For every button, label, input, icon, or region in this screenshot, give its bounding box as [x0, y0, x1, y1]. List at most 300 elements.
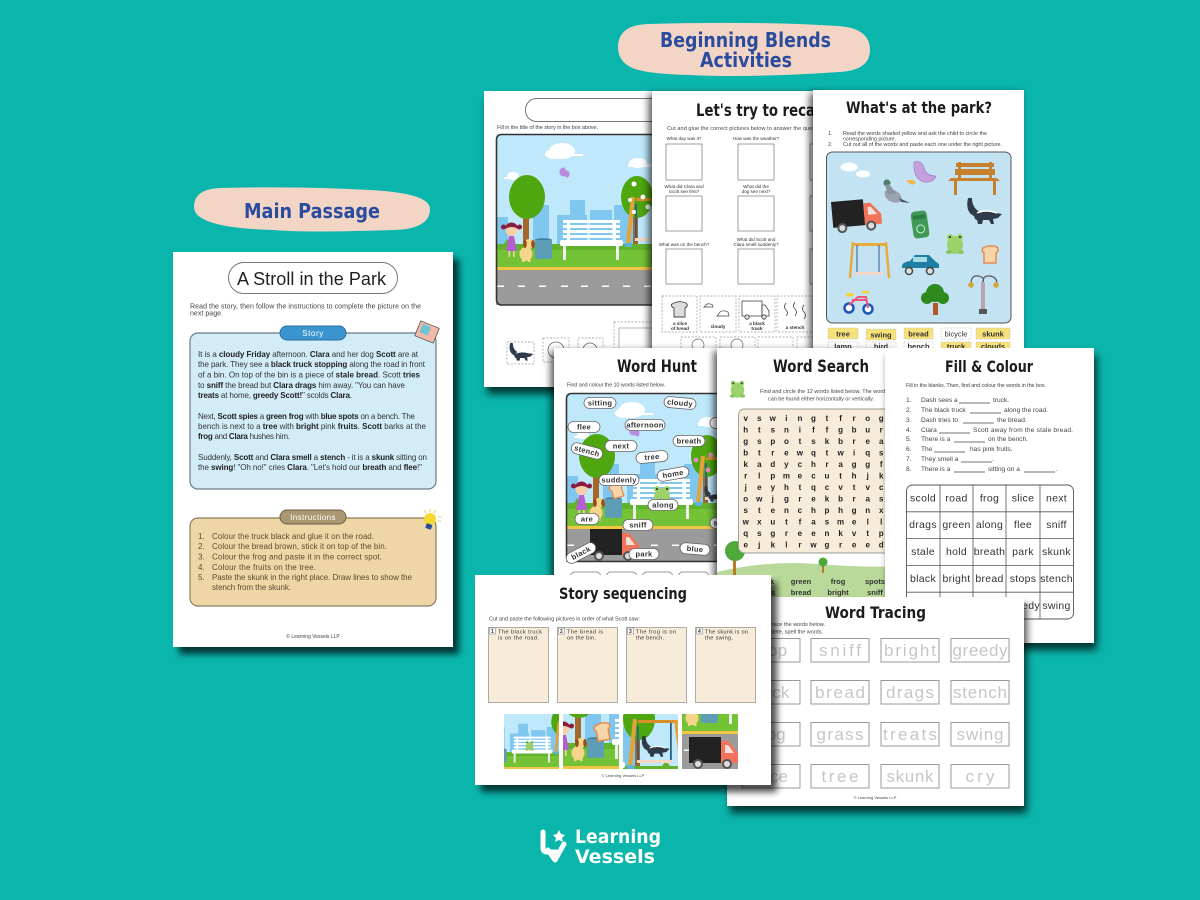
fill-in sentences: Dash sees a — [921, 397, 958, 404]
story box: to sniff the bread but Clara drags him away. "You can have — [198, 381, 406, 390]
instructions: 2. — [828, 142, 833, 148]
letter grid: f — [839, 414, 842, 423]
letter grid: p — [879, 529, 884, 538]
word grid: stops — [1010, 573, 1036, 585]
tracing boxes: drags — [886, 683, 934, 702]
heading: Beginning Blends Activities — [618, 23, 870, 76]
word grid — [906, 485, 1074, 619]
letter grid: w — [809, 540, 817, 550]
picture: truck on road — [662, 598, 962, 769]
letter grid: t — [826, 414, 829, 423]
question grid: What was on the bench? — [659, 242, 710, 247]
letter grid: r — [880, 426, 883, 434]
word list — [755, 577, 885, 597]
letter grid: s — [743, 506, 748, 515]
heading: Main Passage — [194, 187, 430, 232]
word grid: drags — [909, 519, 937, 531]
instruction: Find and colour the 10 words listed below. — [567, 382, 665, 388]
fill-in sentences: 8. — [906, 466, 912, 473]
letter grid: o — [743, 494, 748, 504]
instructions: Cut out all of the words and paste each one under the right picture. — [843, 142, 1002, 148]
title: Story sequencing — [559, 584, 687, 603]
letter grid: q — [811, 448, 816, 458]
letter grid: c — [798, 506, 803, 515]
word list: bright — [827, 588, 849, 597]
fill-in sentences: 4. — [906, 427, 912, 434]
title: Word Search — [773, 357, 869, 377]
tracing boxes: greedy — [952, 641, 1008, 660]
word grid: bright — [942, 573, 971, 585]
letter grid: k — [838, 529, 843, 538]
panel: Fill & Colour page — [885, 348, 1094, 643]
letter grid: k — [743, 460, 748, 469]
letter grid: t — [758, 426, 761, 434]
letter grid: g — [838, 426, 843, 434]
letter grid: c — [811, 472, 816, 480]
letter grid: t — [758, 506, 761, 515]
word tags — [564, 396, 740, 583]
fill-in sentences: sitting on a — [988, 466, 1020, 473]
letter grid: s — [757, 437, 762, 446]
tracing boxes: slice — [754, 767, 788, 786]
question grid: What did Scott and — [737, 237, 776, 242]
word tags: cloudy — [667, 397, 694, 409]
letter grid: l — [785, 540, 788, 550]
instructions — [760, 389, 888, 402]
instructions — [745, 622, 825, 636]
word tags: flee — [577, 422, 591, 432]
instructions: Once complete, spell the words. — [745, 630, 823, 636]
tracing boxes: tree — [822, 767, 858, 786]
fill-in sentences: 6. — [906, 446, 912, 453]
word grid: green — [942, 519, 971, 531]
letter grid: b — [852, 426, 857, 434]
word tags: sniff — [629, 520, 647, 530]
tracing boxes: grass — [816, 725, 864, 744]
letter grid: j — [866, 472, 869, 480]
panel: Word Hunt page — [554, 348, 866, 638]
word tags: suddenly — [601, 476, 637, 484]
letter grid: r — [853, 494, 856, 504]
answer cut-outs: a black — [749, 321, 765, 326]
letter grid: f — [812, 426, 815, 434]
letter grid: k — [825, 437, 830, 446]
question grid: What day was it? — [667, 136, 702, 141]
letter grid: t — [826, 448, 829, 458]
letter grid: t — [839, 472, 842, 480]
word grid: hold — [946, 546, 967, 558]
word grid: stale — [911, 546, 935, 558]
panel: Word Tracing page — [727, 597, 1024, 806]
word tags: breath — [677, 436, 701, 446]
picture: bread on bin — [548, 633, 848, 804]
instructions box: Paste the skunk in the right place. Draw lines to show the — [212, 573, 413, 582]
icon: car — [902, 255, 939, 274]
word tags: tree — [644, 452, 660, 462]
letter grid: x — [879, 506, 884, 515]
fill-in sentences: truck. — [993, 397, 1009, 404]
title: Word Hunt — [617, 357, 697, 377]
instruction: Fill in the blanks. Then, find and colour the words in the box. — [906, 383, 1046, 389]
letter grid: h — [784, 483, 789, 492]
instructions: corresponding picture. — [843, 136, 896, 142]
heading: Beginning Blends Activities: Activities — [700, 48, 792, 72]
letter grid — [738, 409, 928, 553]
icon: bicycle — [844, 291, 872, 314]
fill-in sentences: . — [1056, 466, 1058, 473]
letter grid: t — [785, 518, 788, 526]
story box: bench is next to a tree with bright pink fruits. Scott barks at the — [198, 422, 427, 431]
letter grid: l — [867, 518, 869, 526]
letter grid: d — [770, 460, 775, 469]
letter grid: e — [865, 540, 870, 550]
letter grid: w — [796, 448, 804, 458]
word list: green — [791, 577, 812, 586]
answer cut-outs: truck — [751, 326, 763, 331]
letter grid: s — [757, 414, 762, 423]
sequence boxes — [488, 628, 756, 702]
letter grid: h — [838, 506, 843, 515]
letter grid: e — [852, 518, 857, 526]
letter grid: r — [771, 448, 774, 458]
picture with hidden words — [566, 393, 866, 564]
answer cut-outs: a slice — [673, 321, 687, 326]
word cut-outs: skunk — [982, 330, 1005, 338]
story box: the swing! "Oh no!" cries Clara. "Let's hold our breath and flee!" — [198, 463, 422, 472]
word grid: bread — [975, 573, 1004, 585]
instructions: 1. — [828, 131, 833, 137]
word tags: blue — [686, 544, 704, 554]
story box: Suddenly, Scott and Clara smell a stench - it is a skunk sitting on — [198, 453, 427, 462]
letter grid: f — [799, 518, 802, 526]
tracing boxes: bread — [815, 683, 865, 702]
word grid: flee — [1014, 519, 1032, 531]
instructions box: 5. — [198, 573, 205, 582]
letter grid: v — [743, 414, 748, 423]
letter grid: e — [771, 506, 776, 515]
word grid: greedy — [1006, 600, 1040, 612]
sequence boxes: the bench. — [636, 636, 664, 642]
letter grid: o — [784, 437, 789, 446]
word list: spots — [865, 577, 885, 586]
word tags: afternoon — [626, 420, 664, 430]
word grid: breath — [974, 546, 1005, 558]
sequence boxes: The frog is on — [636, 630, 676, 636]
sequence boxes: 4 — [698, 629, 701, 635]
sequence boxes: The bread is — [567, 630, 603, 636]
title: Word Tracing — [825, 603, 926, 622]
instructions box: Colour the bread brown, stick it on top of the bin. — [212, 542, 387, 551]
story title pill: A Stroll in the Park — [237, 269, 387, 289]
question grid: dog see next? — [742, 189, 771, 194]
letter grid: r — [785, 529, 788, 538]
letter grid: j — [771, 494, 774, 504]
footer: © Learning Vessels LLP — [286, 633, 340, 640]
word tags: hold — [716, 418, 734, 428]
letter grid: k — [825, 494, 830, 504]
letter grid: g — [743, 437, 748, 446]
logo: Learning Vessels: Vessels — [575, 846, 655, 868]
tracing boxes: stench — [953, 683, 1007, 702]
letter grid: e — [798, 529, 803, 538]
word grid: park — [1012, 546, 1034, 558]
letter grid: i — [785, 414, 788, 423]
title: What's at the park? — [846, 98, 992, 117]
instructions box: 4. — [198, 563, 205, 572]
icon: tree — [921, 284, 949, 315]
instructions box: 2. — [198, 542, 205, 551]
letter grid: r — [825, 460, 829, 469]
fill-in sentences — [906, 397, 1073, 473]
letter grid: g — [825, 540, 830, 550]
letter grid: o — [865, 414, 870, 423]
letter grid: e — [757, 483, 762, 492]
icon: frog — [730, 381, 745, 398]
letter grid: p — [770, 437, 775, 446]
word cut-outs: bench — [907, 342, 930, 351]
fill-in sentences: The — [921, 446, 933, 453]
question grid: What did the — [743, 184, 769, 189]
letter grid: p — [770, 472, 775, 480]
word grid: swing — [1042, 600, 1071, 612]
letter grid: v — [852, 529, 857, 538]
word grid: skunk — [1042, 546, 1071, 558]
instructions — [828, 131, 1002, 148]
fill-in sentences: There is a — [921, 466, 951, 473]
letter grid: m — [783, 472, 790, 480]
answer cut-outs — [662, 296, 832, 367]
story box: Story — [302, 329, 324, 338]
letter grid: e — [865, 437, 870, 446]
fill-in sentences: Dash tries to — [921, 417, 958, 424]
letter grid: b — [838, 494, 843, 504]
letter grid: g — [784, 494, 789, 504]
letter grid: j — [744, 483, 747, 492]
letter grid: s — [757, 529, 762, 538]
letter grid: g — [865, 460, 870, 469]
letter grid: a — [838, 460, 843, 469]
letter grid: r — [839, 540, 842, 550]
instructions box: Instructions — [290, 513, 336, 522]
letter grid: f — [880, 460, 883, 469]
letter grid: g — [879, 414, 884, 423]
letter grid: t — [799, 437, 802, 446]
letter grid: n — [825, 529, 830, 538]
park picture — [496, 134, 796, 305]
instruction: Cut and glue the correct pictures below to answer the questions — [667, 126, 827, 132]
letter grid: m — [837, 518, 844, 526]
instructions box: Colour the truck black and glue it on the road. — [212, 532, 374, 541]
letter grid: e — [811, 494, 816, 504]
word cut-outs: clouds — [981, 342, 1005, 351]
fill-in sentences: 7. — [906, 456, 912, 463]
letter grid: i — [799, 426, 801, 434]
story box: the park. They see a black truck stopping along the road in front — [198, 360, 426, 369]
letter grid: n — [797, 414, 802, 423]
letter grid: s — [825, 518, 830, 526]
hills background — [717, 541, 907, 626]
instructions: Trace the words below. — [769, 622, 825, 628]
word tags: park — [635, 550, 653, 558]
heading: Beginning Blends Activities: Beginning Blends — [660, 28, 831, 52]
word grid: sniff — [1046, 519, 1067, 531]
reading instructions — [190, 304, 421, 318]
letter grid: l — [880, 518, 882, 526]
letter grid: q — [865, 448, 870, 458]
icon: swing — [850, 242, 889, 278]
word cut-outs: bread — [908, 330, 929, 338]
letter grid: s — [811, 437, 816, 446]
word tags: along — [652, 500, 674, 510]
fill-in sentences: has pink fruits. — [970, 446, 1013, 453]
story box: treats at home, greedy Scott!" scolds Clara. — [198, 391, 352, 400]
word grid: stench — [1040, 573, 1073, 585]
panel: story picture page — [484, 91, 796, 387]
instruction: Cut and paste the following pictures in order of what Scott saw: — [489, 616, 640, 622]
fill-in sentences: There is a — [921, 436, 951, 443]
letter grid: q — [743, 529, 748, 538]
sequence boxes: The black truck — [498, 630, 542, 636]
letter grid: n — [784, 426, 789, 434]
fill-in sentences: . — [992, 456, 994, 463]
word grid: road — [945, 492, 968, 504]
icon: light bulb — [424, 509, 442, 530]
letter grid: j — [757, 540, 760, 550]
word cut-outs: tree — [836, 330, 850, 338]
word list: truck — [756, 577, 775, 586]
letter grid: a — [811, 518, 816, 526]
icon: truck — [831, 198, 883, 233]
question grid: How was the weather? — [733, 136, 780, 141]
word list: bread — [791, 588, 812, 597]
picture: skunk on swing — [498, 656, 798, 827]
tracing boxes — [742, 638, 1009, 788]
logo: Learning Vessels — [543, 826, 661, 868]
letter grid: g — [852, 460, 857, 469]
icon: butterfly — [906, 162, 936, 185]
question grid: What did Clara and — [664, 184, 704, 189]
letter grid: a — [879, 437, 884, 446]
picture panel — [826, 152, 1011, 323]
word cut-outs: swing — [870, 330, 892, 340]
letter grid: e — [743, 540, 748, 550]
answer cut-outs: a stench — [786, 325, 805, 330]
letter grid: d — [879, 540, 884, 550]
fill-in sentences: 5. — [906, 436, 912, 443]
fill-in sentences: They smell a — [921, 456, 959, 463]
letter grid: v — [838, 483, 843, 492]
story box: It is a cloudy Friday afternoon. Clara and her dog Scott are at — [198, 350, 419, 359]
letter grid: s — [771, 426, 776, 434]
question grid: Scott see first? — [669, 189, 700, 194]
icon: park bench — [948, 162, 1000, 195]
icon: clouds — [840, 162, 870, 178]
word cut-outs: bicycle — [945, 330, 967, 338]
letter grid: f — [826, 426, 829, 434]
word cut-outs: lamp — [834, 342, 852, 351]
tracing boxes: cry — [966, 767, 995, 786]
letter grid: i — [853, 448, 855, 458]
letter grid: b — [838, 437, 843, 446]
letter grid: s — [879, 448, 884, 458]
instructions: Read the words shaded yellow and ask the child to circle the — [843, 131, 987, 137]
tracing boxes: frog — [756, 725, 786, 744]
fill-in sentences: 2. — [906, 407, 912, 414]
word grid: scold — [910, 492, 936, 504]
word tags: skunk — [713, 518, 737, 528]
letter grid: r — [853, 437, 856, 446]
tracing boxes: treats — [883, 725, 937, 744]
picture: frog on bench — [470, 681, 664, 792]
word grid: frog — [980, 492, 999, 504]
tracing boxes: skunk — [886, 767, 934, 786]
letter grid: w — [742, 518, 750, 526]
panel: Story sequencing page — [470, 575, 962, 827]
letter grid: q — [811, 483, 816, 492]
question grid: Clara smell suddenly? — [733, 242, 779, 247]
letter grid: r — [853, 414, 856, 423]
panel: main passage page — [173, 252, 453, 647]
word tags: home — [662, 468, 684, 480]
story box — [190, 326, 436, 489]
letter grid: c — [825, 483, 830, 492]
panel: Word Search page — [717, 348, 928, 638]
title: Fill & Colour — [945, 357, 1033, 376]
letter grid: k — [771, 540, 776, 550]
fill-in sentences: on the bench. — [988, 436, 1028, 443]
letter grid: t — [853, 483, 856, 492]
word list: treats — [755, 588, 775, 597]
word cut-outs — [828, 328, 1010, 353]
icon: bread — [982, 246, 998, 263]
letter grid: x — [757, 518, 762, 526]
letter grid: r — [798, 494, 801, 504]
logo mark — [543, 830, 565, 860]
story title pill — [228, 262, 398, 294]
word grid: next — [1046, 492, 1067, 504]
letter grid: n — [784, 506, 789, 515]
word grid: black — [910, 573, 936, 585]
footer: © Learning Vessels LLP — [854, 795, 897, 800]
letter grid: h — [811, 460, 816, 469]
instructions box: Colour the fruits on the tree. — [212, 563, 316, 572]
icon: book — [415, 321, 439, 343]
letter grid: t — [866, 529, 869, 538]
letter grid: k — [879, 472, 884, 480]
letter grid: w — [836, 448, 844, 458]
story box: Next, Scott spies a green frog with blue spots on a bench. The — [198, 412, 416, 421]
letter grid: v — [865, 483, 870, 492]
letter grid: c — [798, 460, 803, 469]
letter grid: h — [852, 472, 857, 480]
icon: recycling bin — [910, 210, 930, 239]
fill-in sentences: 1. — [906, 397, 912, 404]
tracing boxes: stop — [755, 641, 787, 660]
fill-in sentences: the bread. — [997, 417, 1027, 424]
sequence boxes: 2 — [560, 629, 563, 635]
sequence boxes: the swing. — [705, 636, 733, 642]
letter grid: l — [758, 472, 760, 480]
letter grid: b — [743, 448, 748, 458]
icon: pigeon — [882, 180, 910, 206]
letter grid: g — [770, 529, 775, 538]
letter grid: n — [865, 506, 870, 515]
answer cut-outs: of bread — [671, 326, 689, 331]
letter grid: h — [811, 506, 816, 515]
letter grid: s — [879, 494, 884, 504]
instructions box: 1. — [198, 532, 205, 541]
letter grid: a — [757, 460, 762, 469]
